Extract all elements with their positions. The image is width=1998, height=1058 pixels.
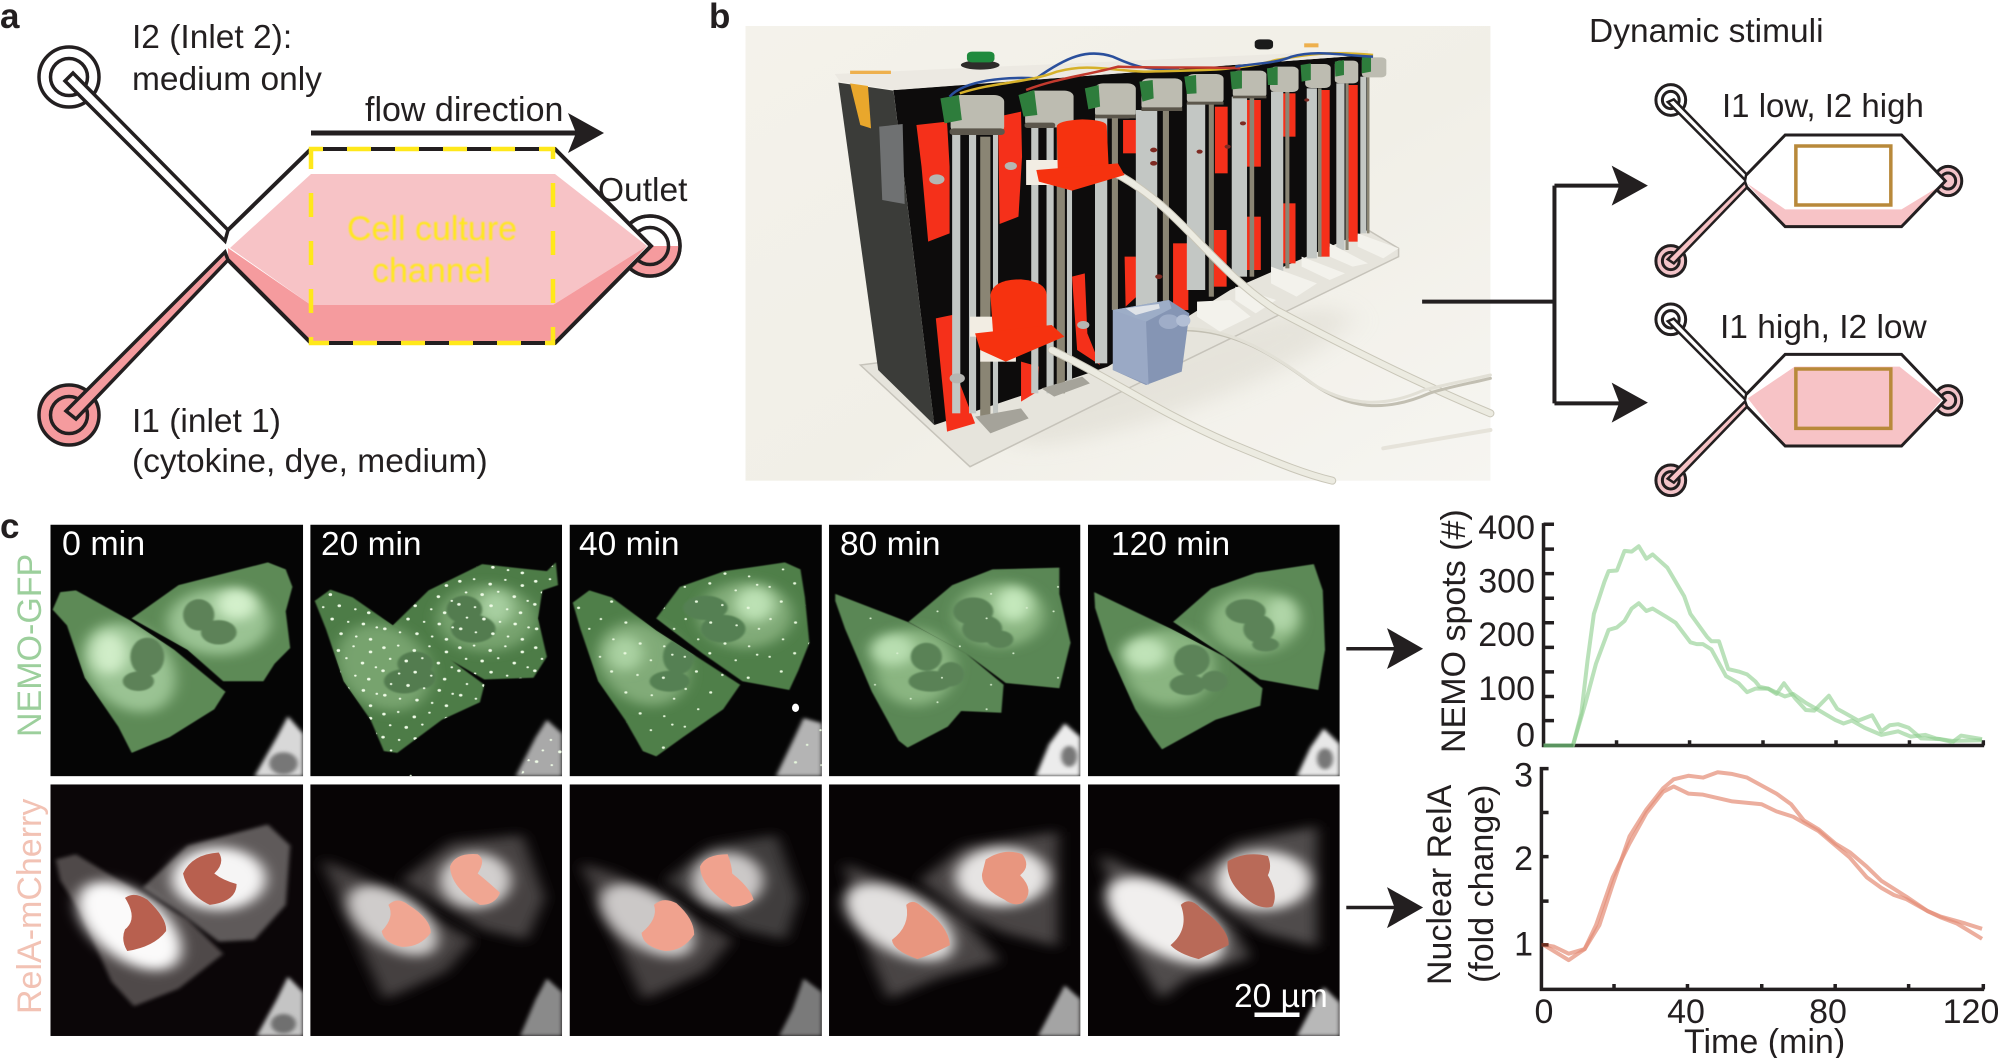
y axis ticks: NEMO spots: 200 (1478, 616, 1535, 654)
panel: time-course charts (1346, 522, 1986, 992)
motors (951, 57, 1386, 133)
microscopy: NEMO-GFP 120 min (1088, 525, 1340, 776)
y axis title: fold change: (fold change) (1463, 785, 1501, 983)
time label: 120 min: 120 min (1111, 526, 1230, 563)
y axis ticks: nuclear RelA: 3 (1514, 756, 1533, 794)
y axis ticks: NEMO spots: 400 (1478, 509, 1535, 547)
time label: 20 min: 20 min (321, 526, 422, 563)
inlet 1 description: (cytokine, dye, medium) (132, 443, 488, 480)
microscopy: RelA-mCherry 0 min (50, 784, 303, 1036)
microscopy: NEMO-GFP 80 min (829, 525, 1080, 776)
icon: inlet 1 port (39, 385, 99, 445)
chip: I1 high, I2 low (1656, 304, 1962, 496)
cell culture channel label: Cell culture (347, 210, 517, 248)
chip: dark pink flow region (228, 246, 647, 343)
time label: 40 min: 40 min (579, 526, 680, 563)
microscopy: RelA-mCherry 120 min (1087, 784, 1340, 1036)
arrow: flow direction (311, 113, 604, 153)
y axis ticks: nuclear RelA (1514, 756, 1533, 964)
inlet 2 description: medium only (132, 61, 322, 98)
arrow: RelA images to chart (1346, 887, 1423, 928)
arrow: NEMO images to chart (1346, 628, 1423, 669)
outlet label: Outlet (598, 172, 688, 209)
chip: inlet 2 channel (65, 73, 228, 241)
microscopy: NEMO-GFP 40 min (570, 525, 822, 776)
y axis title: Nuclear RelA: Nuclear RelA (1421, 784, 1459, 985)
y axis ticks: NEMO spots: 300 (1478, 562, 1535, 600)
x axis ticks: 40 (1667, 993, 1705, 1031)
x axis ticks: 80 (1809, 993, 1847, 1031)
x axis ticks: 0 (1535, 993, 1553, 1031)
panel label c: c (0, 507, 19, 546)
row label: NEMO-GFP: NEMO-GFP (11, 554, 49, 737)
scale bar: 20 µm: 20 µm (1234, 978, 1328, 1015)
chip: inlet 1 channel (66, 252, 228, 419)
y axis ticks: NEMO spots: 0 (1516, 716, 1535, 754)
microscopy: RelA-mCherry 40 min (570, 784, 822, 1036)
panel: dynamic stimuli schematic (1422, 83, 1964, 498)
x axis ticks: 120 (1943, 993, 1998, 1031)
arrow: branching connector (1422, 166, 1648, 423)
y axis ticks: nuclear RelA: 2 (1514, 840, 1533, 878)
inlet 1 label: I1 (inlet 1) (132, 403, 281, 440)
screws (929, 162, 1089, 383)
chip: channel outline (228, 149, 651, 343)
microscopy: NEMO-GFP 20 min (310, 525, 562, 776)
y axis ticks: nuclear RelA: 1 (1514, 926, 1533, 964)
red reservoir holders (970, 119, 1125, 362)
icon: inlet 2 port (39, 47, 99, 107)
chip: I1 low, I2 high (1656, 85, 1962, 276)
panel: a, microfluidic chip diagram (0, 0, 688, 480)
row label: RelA-mCherry: RelA-mCherry (11, 799, 49, 1014)
icon: outlet port (620, 216, 680, 276)
panel: b, photo of syringe pump device (746, 26, 1494, 485)
label: I1 low, I2 high: I1 low, I2 high (1722, 87, 1924, 124)
chip: channel interior (228, 149, 651, 343)
label: I1 high, I2 low: I1 high, I2 low (1720, 309, 1928, 346)
driver boards (940, 57, 1371, 123)
time label: 0 min: 0 min (62, 525, 145, 563)
y axis title: NEMO spots: NEMO spots (#) (1435, 509, 1473, 753)
y axis ticks: NEMO spots: 100 (1478, 670, 1535, 708)
panel: c, NEMO-GFP and RelA-mCherry time-lapse microscopy (50, 524, 1340, 1036)
line chart: NEMO spots (1544, 523, 1984, 746)
chip: light pink flow region (230, 174, 647, 305)
tubes (1052, 173, 1490, 481)
cell culture channel label (347, 210, 517, 290)
x axis ticks (1535, 993, 1998, 1031)
wires (950, 53, 1373, 97)
microscopy: RelA-mCherry 80 min (827, 784, 1080, 1036)
cell culture channel label: channel (372, 252, 491, 290)
line chart: nuclear RelA (1541, 767, 1984, 989)
time label: 80 min: 80 min (840, 526, 941, 563)
blue chamber (1113, 300, 1190, 385)
heading: dynamic stimuli: Dynamic stimuli (1589, 13, 1824, 50)
grey and white feet (975, 377, 1090, 433)
flow direction label: flow direction (365, 91, 563, 129)
microscopy: NEMO-GFP 0 min (50, 525, 303, 776)
silver rails and plates (952, 77, 1366, 413)
inlet 2 label: I2 (Inlet 2): (132, 19, 292, 56)
chip: yellow dashed cell culture region (311, 149, 553, 343)
red brackets (916, 85, 1358, 432)
y axis ticks: NEMO spots (1478, 509, 1535, 754)
microscopy: RelA-mCherry 20 min (310, 784, 562, 1036)
threaded rods (980, 77, 1369, 417)
